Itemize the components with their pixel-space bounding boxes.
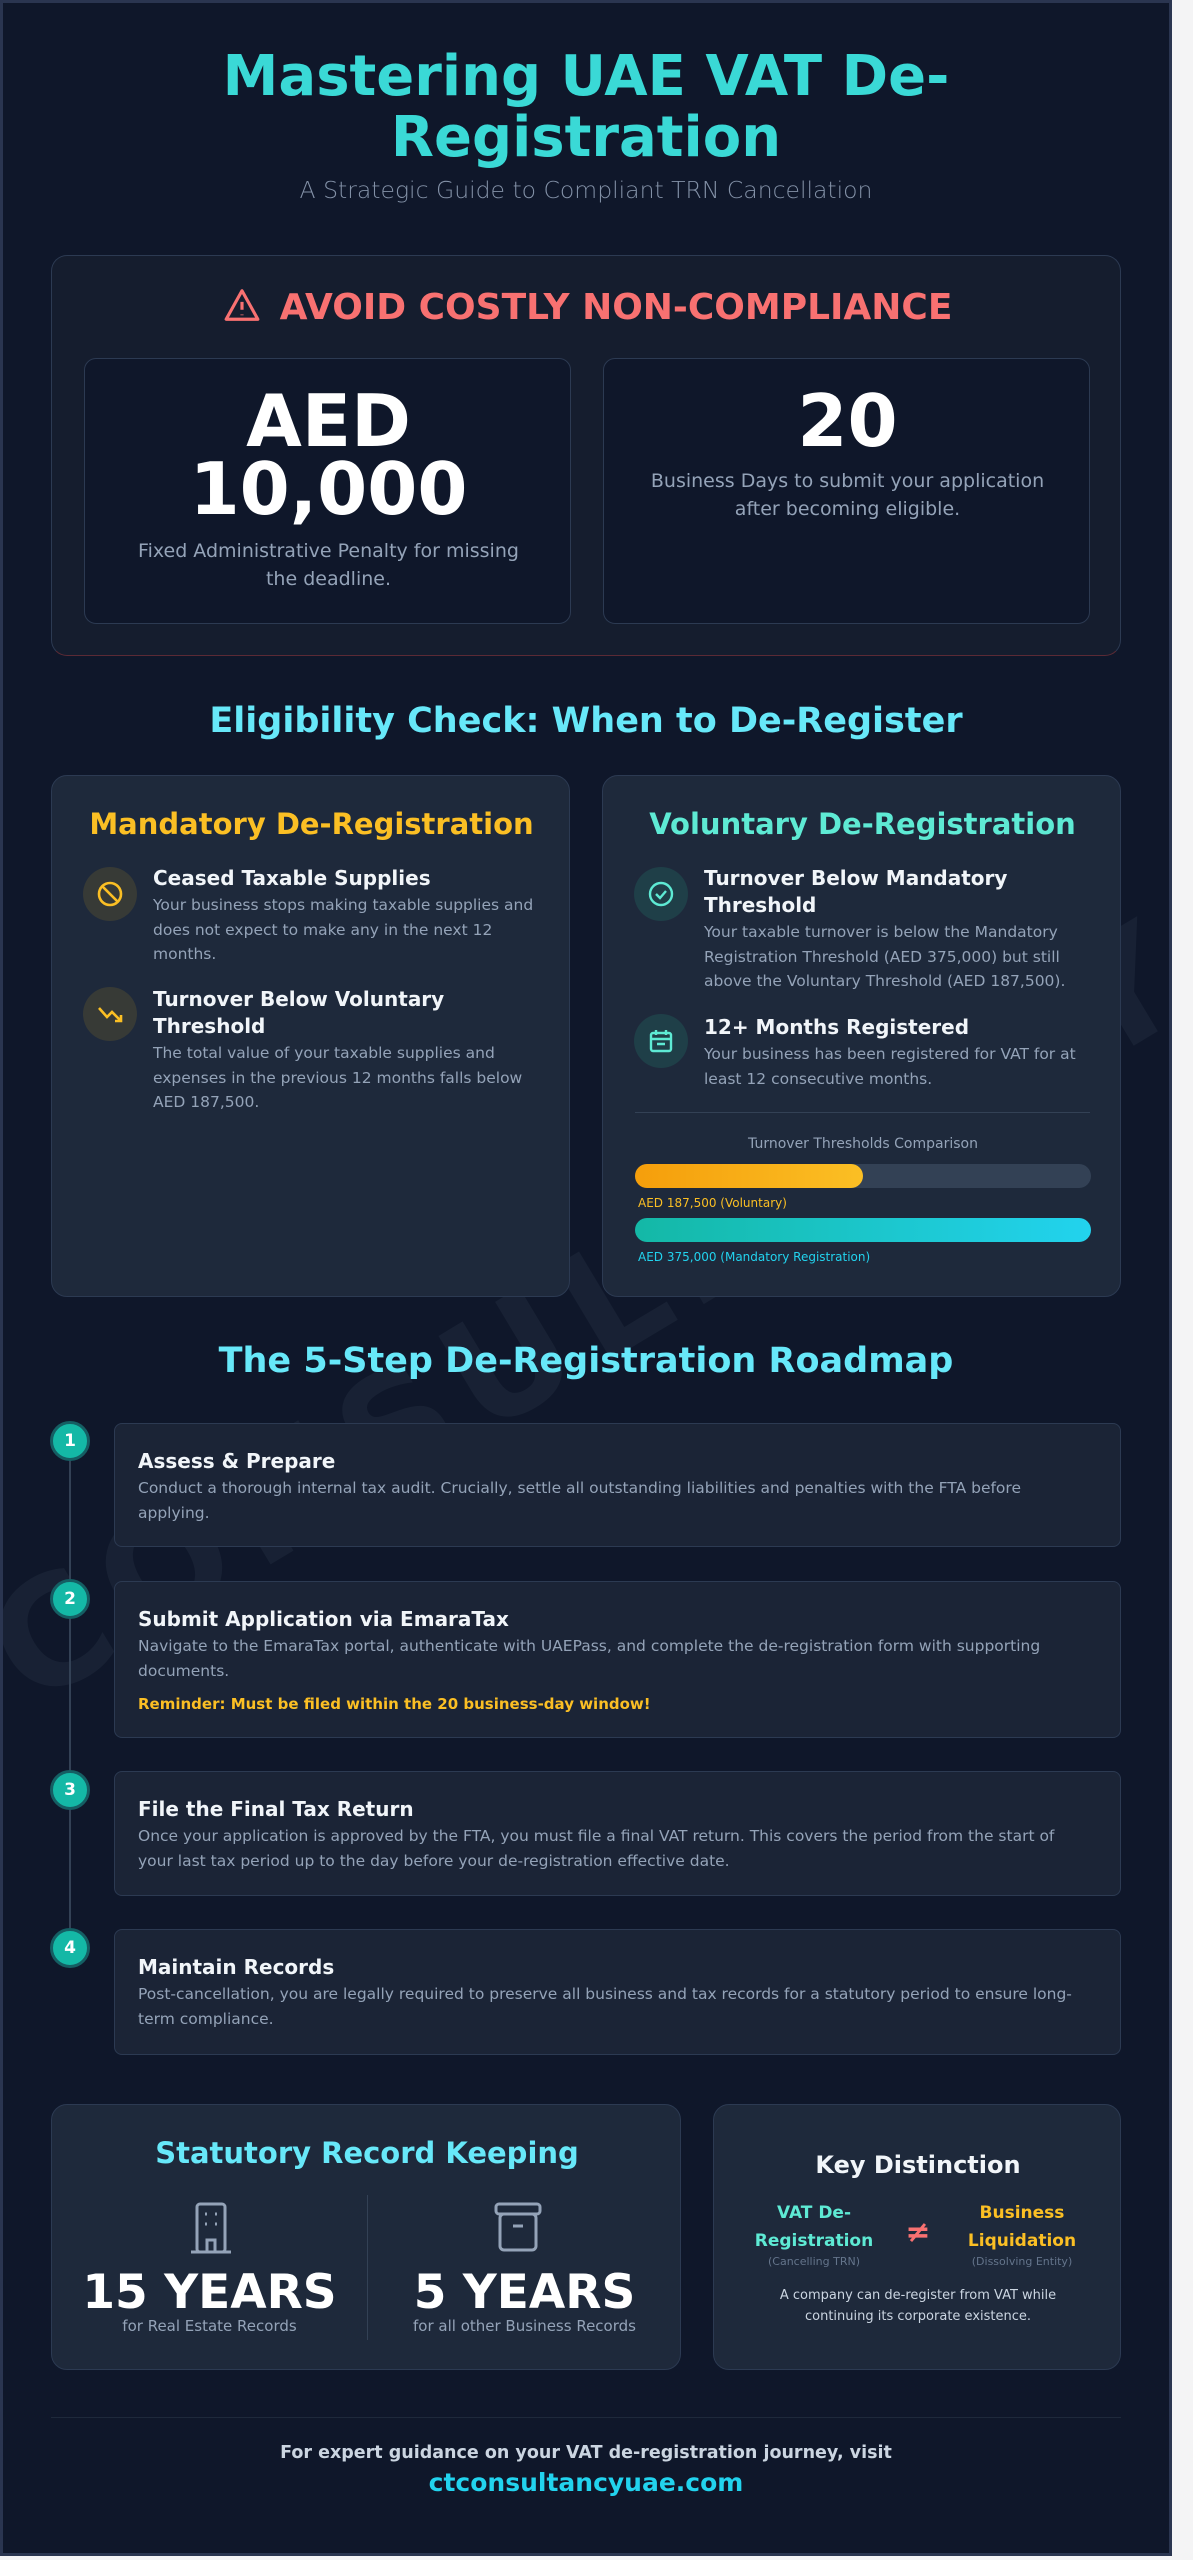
icon: trending down: [83, 987, 137, 1041]
panel: mandatory: Ceased Taxable Supplies: [153, 866, 431, 890]
icon: calendar: [634, 1014, 688, 1068]
text: Post-cancellation, you are legally required to preserve all business and tax records for a statutory period to ensure long-term compliance.: [138, 1985, 1072, 2028]
panel: record keeping: for Real Estate Records: [122, 2317, 297, 2335]
step 3: [50, 1770, 90, 1810]
bar chart: thresholds: Turnover Thresholds Comparison: [748, 1136, 978, 1152]
icon: archive: [494, 2202, 542, 2252]
step 2: [50, 1579, 90, 1619]
footer: For expert guidance on your VAT de-registration journey, visit: [280, 2443, 892, 2463]
panel: key distinction: A company can de-register from VAT while continuing its corporate existence.: [780, 2288, 1056, 2324]
stat: 20 days: 20: [797, 379, 898, 463]
step 4: [50, 1928, 90, 1968]
heading: roadmap: The 5-Step De-Registration Roadmap: [219, 1341, 953, 1381]
title: [223, 44, 949, 170]
footer: [280, 2443, 892, 2497]
panel: record keeping: Statutory Record Keeping: [155, 2136, 579, 2170]
icon: building: [191, 2202, 231, 2254]
timeline line: [69, 1441, 71, 1949]
text: Maintain Records: [138, 1955, 334, 1979]
panel: non-compliance warning: [51, 255, 1121, 656]
bar chart: thresholds: AED 187,500 (Voluntary): [638, 1196, 787, 1210]
panel: record keeping: for all other Business Records: [413, 2317, 636, 2335]
panel: voluntary: Turnover Below Mandatory Threshold: [704, 866, 1007, 917]
panel: key distinction: (Cancelling TRN): [768, 2255, 860, 2268]
text: Once your application is approved by the FTA, you must file a final VAT return. This covers the period from the start of your last tax period up to the day before your de-registration effective date.: [138, 1827, 1054, 1870]
stat: penalty: [84, 358, 571, 624]
panel: mandatory: The total value of your taxable supplies and expenses in the previous 12 months falls below AED 187,500.: [153, 1044, 522, 1111]
text: Submit Application via EmaraTax: [138, 1607, 509, 1631]
icon: warning triangle: [224, 289, 260, 321]
panel: key distinction: Key Distinction: [815, 2151, 1021, 2179]
panel: voluntary: 12+ Months Registered: [704, 1015, 969, 1039]
stat: 20 days: [603, 358, 1090, 624]
panel: key distinction: ≠: [905, 2215, 931, 2250]
title: Registration: [391, 105, 781, 170]
step 4: 4: [64, 1938, 76, 1958]
icon: ban: [83, 867, 137, 921]
panel: mandatory: Turnover Below Voluntary Threshold: [153, 987, 444, 1038]
panel: key distinction: [713, 2104, 1121, 2370]
step 1: [50, 1421, 90, 1461]
panel: voluntary: Your taxable turnover is below the Mandatory Registration Threshold (AED 375,000) but still above the Voluntary Threshold (AED 187,500).: [704, 923, 1065, 990]
panel: key distinction: VAT De-: [777, 2203, 851, 2223]
text: File the Final Tax Return: [138, 1797, 414, 1821]
stat: 20 days: Business Days to submit your application after becoming eligible.: [651, 470, 1044, 520]
stat: penalty: AED: [246, 379, 411, 463]
panel: mandatory: Mandatory De-Registration: [89, 807, 534, 841]
panel: mandatory: [51, 775, 570, 1297]
heading: eligibility: Eligibility Check: When to De-Register: [209, 701, 963, 741]
bar chart: thresholds: [635, 1136, 1091, 1264]
panel: voluntary: [602, 775, 1121, 1297]
panel: record keeping: 15 YEARS: [82, 2265, 337, 2320]
panel: key distinction: (Dissolving Entity): [972, 2255, 1072, 2268]
stat: penalty: Fixed Administrative Penalty for missing the deadline.: [138, 540, 519, 590]
panel: record keeping: [51, 2104, 681, 2370]
text: Conduct a thorough internal tax audit. Crucially, settle all outstanding liabilities and penalties with the FTA before applying.: [138, 1479, 1021, 1522]
step 1: 1: [64, 1431, 76, 1451]
panel: voluntary: Your business has been registered for VAT for at least 12 consecutive months.: [704, 1045, 1076, 1088]
text: Navigate to the EmaraTax portal, authenticate with UAEPass, and complete the de-registration form with supporting documents.: [138, 1637, 1040, 1680]
step 3: 3: [64, 1780, 76, 1800]
warning heading: AVOID COSTLY NON-COMPLIANCE: [280, 287, 952, 328]
panel: key distinction: Registration: [755, 2231, 873, 2251]
icon: check: [634, 867, 688, 921]
step 2: 2: [64, 1589, 76, 1609]
panel: voluntary: Voluntary De-Registration: [649, 807, 1076, 841]
panel: mandatory: Your business stops making taxable supplies and does not expect to make any in the next 12 months.: [153, 896, 533, 963]
panel: key distinction: Business: [980, 2203, 1064, 2223]
footer: ctconsultancyuae.com: [429, 2468, 743, 2497]
title: Mastering UAE VAT De-: [223, 44, 949, 109]
stat: penalty: 10,000: [190, 447, 467, 531]
text: Assess & Prepare: [138, 1449, 335, 1473]
subtitle: A Strategic Guide to Compliant TRN Cancellation: [300, 176, 872, 204]
panel: key distinction: Liquidation: [968, 2231, 1076, 2251]
bar chart: thresholds: AED 375,000 (Mandatory Registration): [638, 1250, 870, 1264]
panel: record keeping: 5 YEARS: [414, 2265, 635, 2320]
text: Reminder: Must be filed within the 20 business-day window!: [138, 1695, 651, 1713]
